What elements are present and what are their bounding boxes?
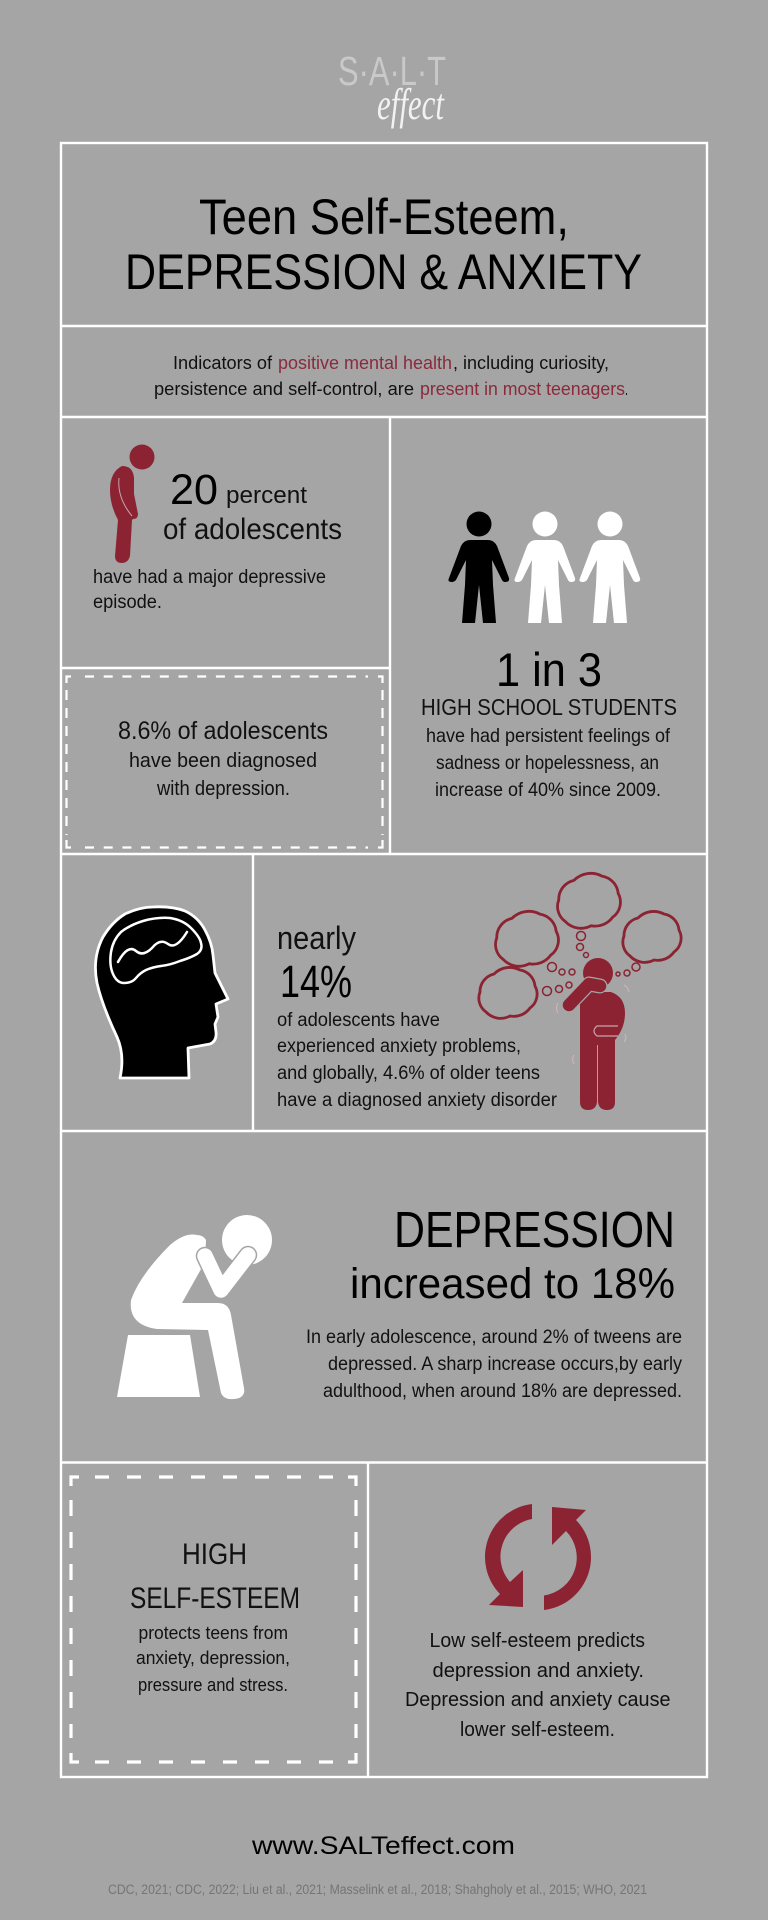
text: persistent feelings: have had persistent feelings of	[426, 725, 671, 747]
text: persistent feelings: sadness or hopelessness, an	[436, 752, 659, 774]
intro text block	[154, 352, 628, 399]
icon: circular arrows	[485, 1504, 591, 1610]
icon: black person	[448, 512, 509, 623]
panel: nearly 14% anxiety text: have a diagnosed anxiety disorder	[277, 1090, 558, 1111]
panel: nearly 14% anxiety text: of adolescents have	[277, 1010, 440, 1031]
icon: stooped figure	[110, 444, 154, 563]
logo: SALT effect: S·A·L·T	[338, 48, 446, 94]
panel: nearly 14% anxiety text: 14%	[280, 956, 352, 1007]
panel: depression increased to 18% text: increased to 18%	[350, 1260, 675, 1308]
panel: 20 percent of adolescents	[93, 444, 342, 613]
text: persistent feelings: increase of 40% since 2009.	[435, 779, 661, 801]
panel: nearly 14% anxiety text: experienced anxiety problems,	[277, 1036, 521, 1057]
logo: SALT effect	[338, 48, 446, 129]
text: high self-esteem: HIGH	[182, 1538, 247, 1571]
intro text block: positive mental health	[278, 352, 452, 373]
panel: 8.6% diagnosed with depression	[66, 676, 382, 848]
panel: 1 in 3 high school students	[421, 512, 677, 801]
panel: depression increased to 18% text: adulthood, when around 18% are depressed.	[323, 1381, 682, 1402]
panel: depression increased to 18% text: depressed. A sharp increase occurs,by early	[328, 1354, 682, 1375]
panel: self-esteem cycle	[405, 1504, 670, 1741]
text: cycle explanation: lower self-esteem.	[460, 1718, 615, 1741]
text: major depressive episode	[93, 567, 326, 613]
text: 8.6% of adolescents: with depression.	[156, 778, 290, 800]
panel: depression increased to 18% text	[306, 1201, 682, 1402]
statistic: 1 in 3: 1 in 3	[496, 643, 602, 696]
icon: white person	[514, 512, 575, 623]
panel: high self-esteem	[71, 1477, 356, 1762]
text: high self-esteem: protects teens from	[138, 1622, 288, 1643]
icon: thinking figure with clouds	[479, 873, 681, 1110]
panel: nearly 14% anxiety text	[277, 920, 558, 1111]
panel: nearly 14% anxiety text: nearly	[277, 920, 356, 956]
text: cycle explanation	[405, 1629, 670, 1741]
citations: CDC, 2021; CDC, 2022; Liu et al., 2021; Masselink et al., 2018; Shahgholy et al., 2015; WHO, 2021	[108, 1882, 647, 1897]
text: high self-esteem	[130, 1538, 300, 1695]
intro text block: .	[625, 378, 628, 399]
text: major depressive episode: episode.	[93, 592, 162, 613]
panel: depression increased to 18% text: DEPRESSION	[394, 1201, 675, 1258]
intro text block: , including curiosity,	[453, 352, 609, 373]
icon: head with brain	[95, 907, 228, 1078]
text: high self-esteem: anxiety, depression,	[136, 1647, 290, 1668]
statistic: 20 percent: 20	[170, 466, 218, 514]
text: cycle explanation: Low self-esteem predicts	[430, 1629, 645, 1652]
logo: SALT effect: effect	[377, 80, 445, 129]
dashed border	[66, 676, 382, 848]
icon: white person	[579, 512, 640, 623]
panel frame grid	[61, 143, 707, 1777]
text: cycle explanation: Depression and anxiety cause	[405, 1688, 670, 1711]
panel: depression increased to 18% text: In early adolescence, around 2% of tweens are	[306, 1327, 682, 1348]
text: 8.6% of adolescents: 8.6% of adolescents	[118, 717, 328, 745]
statistic: 20 percent: percent	[226, 482, 307, 509]
text: major depressive episode: have had a major depressive	[93, 567, 326, 588]
text: 8.6% of adolescents	[118, 717, 328, 800]
text: high self-esteem: pressure and stress.	[138, 1674, 288, 1695]
text: 8.6% of adolescents: have been diagnosed	[129, 750, 317, 772]
intro text block: Indicators of	[173, 352, 273, 373]
icon: seated figure with head in hands	[117, 1215, 272, 1399]
intro text block: persistence and self-control, are	[154, 378, 414, 399]
website url: www.SALTeffect.com	[251, 1832, 515, 1860]
title: Teen Self-Esteem,	[199, 189, 569, 245]
intro text block: present in most teenagers	[420, 378, 625, 399]
heading: high school students: HIGH SCHOOL STUDENTS	[421, 694, 677, 720]
statistic: 20 percent: of adolescents	[163, 513, 342, 546]
title: DEPRESSION & ANXIETY	[125, 244, 642, 300]
text: cycle explanation: depression and anxiety.	[432, 1659, 644, 1682]
title	[125, 189, 642, 300]
dashed border	[71, 1477, 356, 1762]
text: high self-esteem: SELF-ESTEEM	[130, 1582, 300, 1615]
panel: nearly 14% anxiety text: and globally, 4.6% of older teens	[277, 1063, 540, 1084]
statistic: 20 percent	[163, 466, 342, 546]
text: persistent feelings	[426, 725, 671, 801]
